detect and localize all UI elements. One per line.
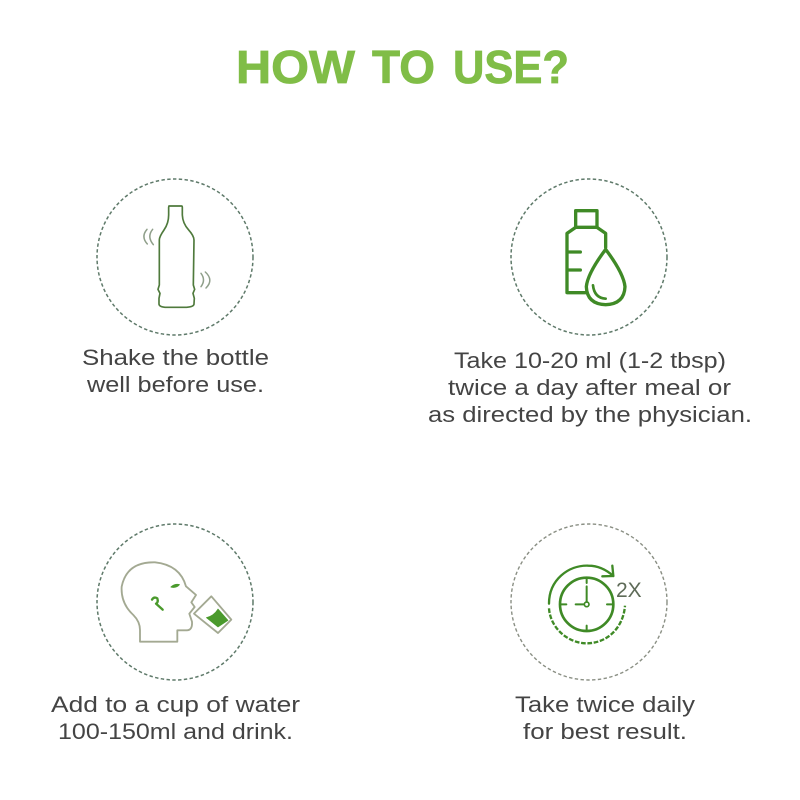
text: drink: [51, 692, 300, 744]
icon: clock: [549, 566, 625, 643]
icon: head with cup: [122, 562, 231, 642]
dashed circle: twice daily: [511, 524, 667, 680]
panel: twice daily: [511, 524, 695, 744]
text: twice daily: for best result.: [523, 719, 687, 744]
dashed circle: dose: [511, 179, 667, 335]
panel: drink: [51, 524, 300, 744]
title: USE?: [453, 41, 569, 93]
text: twice daily: [515, 692, 695, 744]
title: HOW: [236, 41, 356, 93]
dashed circle: shake: [97, 179, 253, 335]
text: dose: as directed by the physician.: [428, 402, 752, 427]
text: shake: Shake the bottle: [82, 345, 269, 370]
title: [236, 41, 569, 93]
text: drink: Add to a cup of water: [51, 692, 300, 717]
text: shake: well before use.: [86, 372, 264, 397]
panel: dose: [428, 179, 752, 427]
label: 2X: 2X: [616, 579, 642, 602]
text: dose: [428, 348, 752, 427]
icon: bottle and drop: [567, 211, 625, 305]
text: twice daily: Take twice daily: [515, 692, 695, 717]
panel: shake: [82, 179, 269, 397]
icon: bottle: [144, 206, 210, 307]
dashed circle: drink: [97, 524, 253, 680]
title: TO: [372, 41, 435, 93]
text: shake: [82, 345, 269, 397]
text: dose: twice a day after meal or: [448, 375, 731, 400]
text: drink: 100-150ml and drink.: [58, 719, 293, 744]
text: dose: Take 10-20 ml (1-2 tbsp): [454, 348, 726, 373]
